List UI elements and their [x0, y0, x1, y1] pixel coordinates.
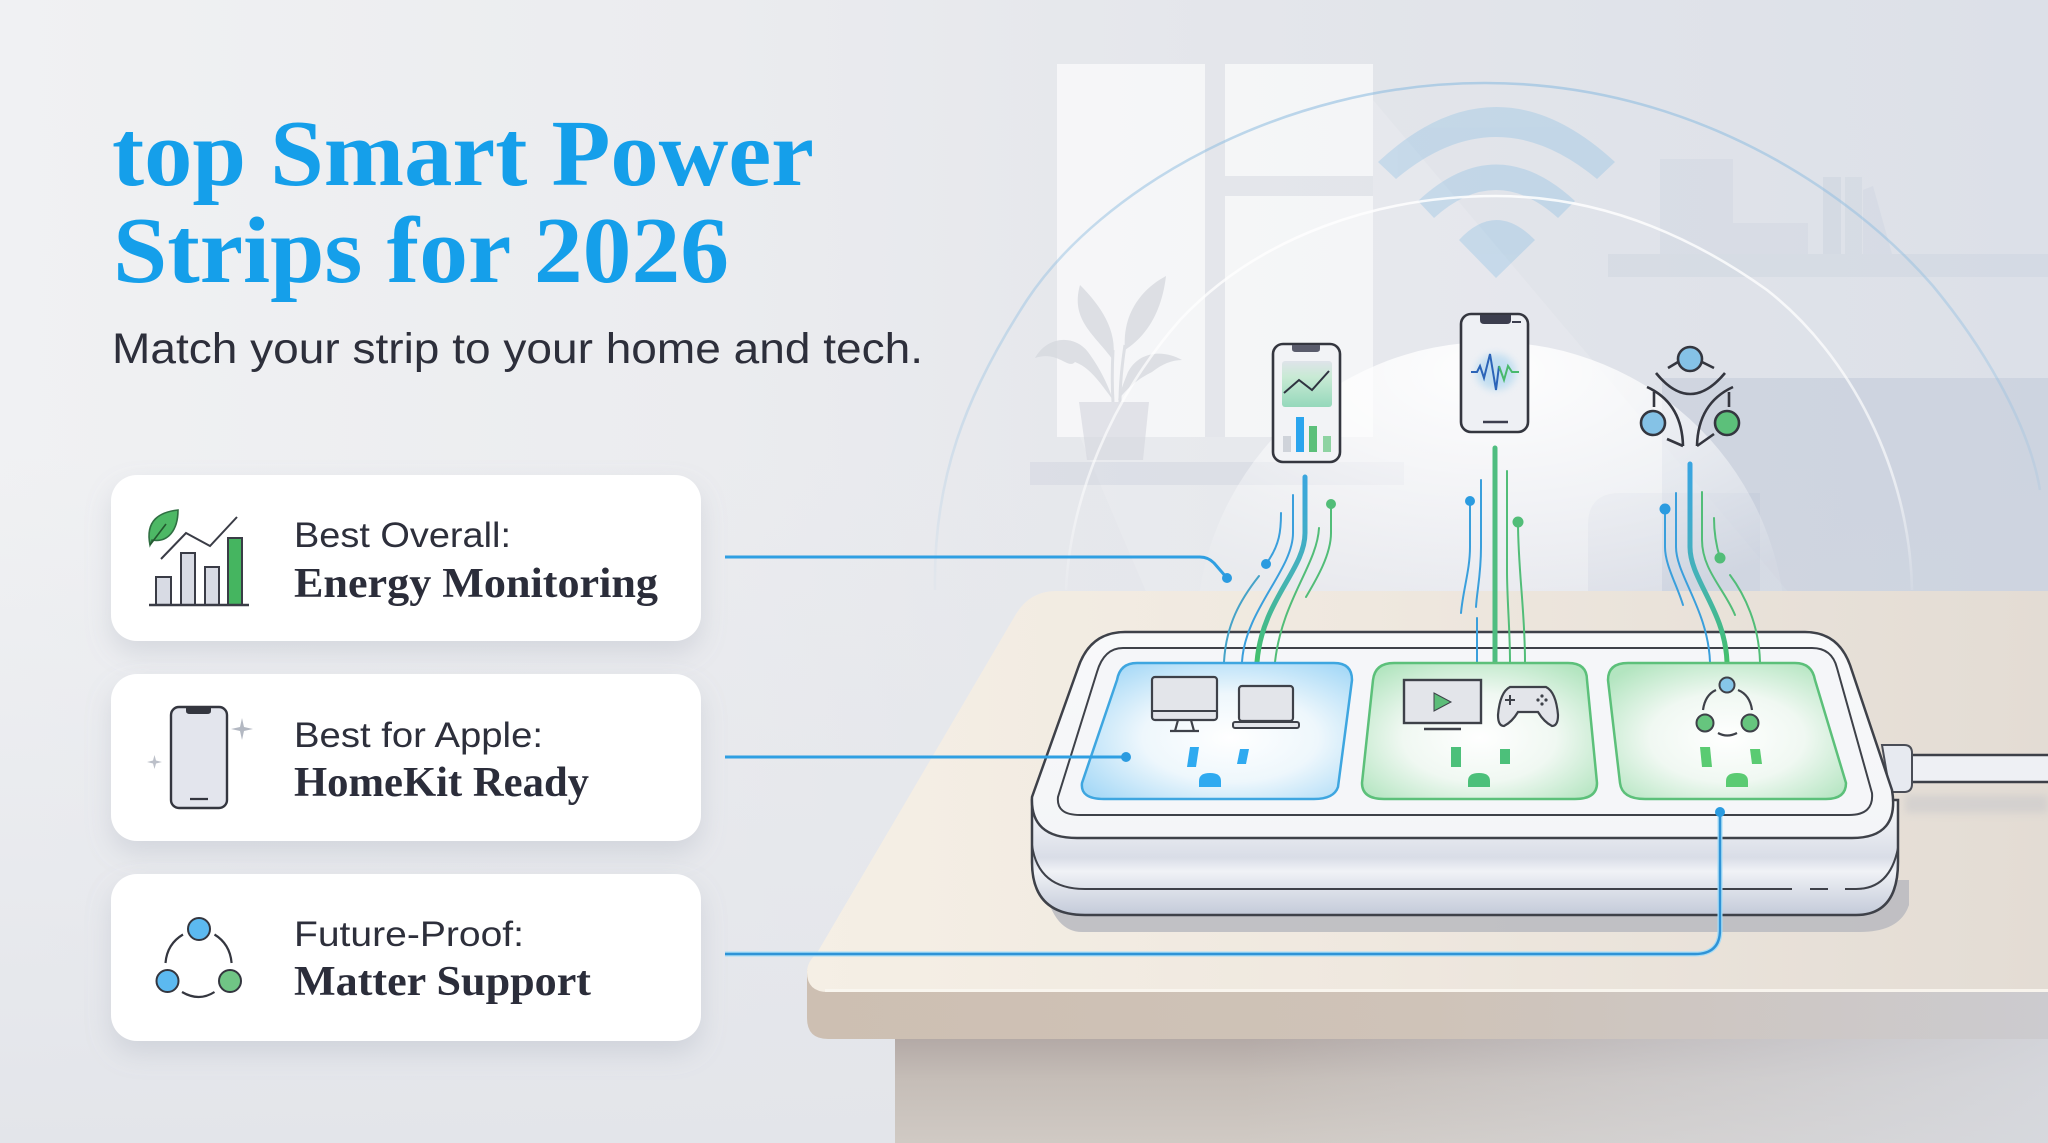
icon: laptop: [1233, 686, 1299, 728]
connector line: homekit: [725, 752, 1131, 762]
card text: Best for Apple:: [294, 716, 543, 755]
strip inner panel: [1058, 648, 1872, 815]
card: homekit ready: [111, 674, 701, 841]
card text: Best Overall:: [294, 516, 511, 555]
strip mid seam: [1032, 845, 1898, 889]
wires to hub: [1660, 464, 1760, 662]
wires to phone 1: [1224, 477, 1336, 662]
title: [112, 102, 814, 303]
card: matter support: Matter Support: [294, 959, 591, 1005]
title: Strips for 2026: [113, 199, 729, 303]
card: matter support: [111, 874, 701, 1041]
icon: phone with waveform: [1461, 314, 1528, 432]
icon: tv: [1404, 680, 1481, 729]
cord shadow: [1905, 795, 2048, 813]
wires to phone 2: [1461, 448, 1525, 662]
strip body: [1032, 800, 1898, 915]
outlet slots: [1187, 747, 1249, 787]
outlet 1: blue: [1082, 663, 1352, 799]
title: top Smart Power: [112, 102, 814, 206]
desk: [807, 591, 2048, 1143]
outlet slots: [1451, 747, 1510, 787]
icon: game controller: [1498, 687, 1558, 726]
icon: bar chart with leaf: [149, 510, 249, 605]
strip top face: [1032, 632, 1893, 838]
icon: phone with sparkles: [147, 707, 253, 808]
card: energy monitoring: Energy Monitoring: [294, 561, 658, 607]
outlet 2: green: [1362, 663, 1597, 799]
card: homekit ready: HomeKit Ready: [294, 760, 589, 806]
icon: phone with energy chart: [1273, 344, 1340, 462]
connector line: energy monitoring: [725, 557, 1232, 583]
background: room scene: [1030, 64, 2048, 594]
signal dome and arcs: [935, 83, 2040, 637]
card: energy monitoring: [111, 475, 701, 641]
power strip shadow: [1043, 880, 1909, 932]
outlet 3: green: [1608, 663, 1846, 799]
icon: three connected nodes: [156, 918, 241, 997]
icon: monitor: [1152, 677, 1217, 731]
power strip: [1032, 632, 1898, 915]
subtitle: Match your strip to your home and tech.: [112, 325, 923, 373]
connector line: matter: [725, 807, 1725, 954]
card text: Future-Proof:: [294, 915, 524, 954]
outlet slots: [1700, 747, 1762, 787]
icon: matter network: [1641, 347, 1739, 446]
icon: matter hub: [1696, 678, 1758, 736]
power cord and plug: [1882, 745, 2048, 792]
wifi symbol: [1378, 107, 1615, 278]
